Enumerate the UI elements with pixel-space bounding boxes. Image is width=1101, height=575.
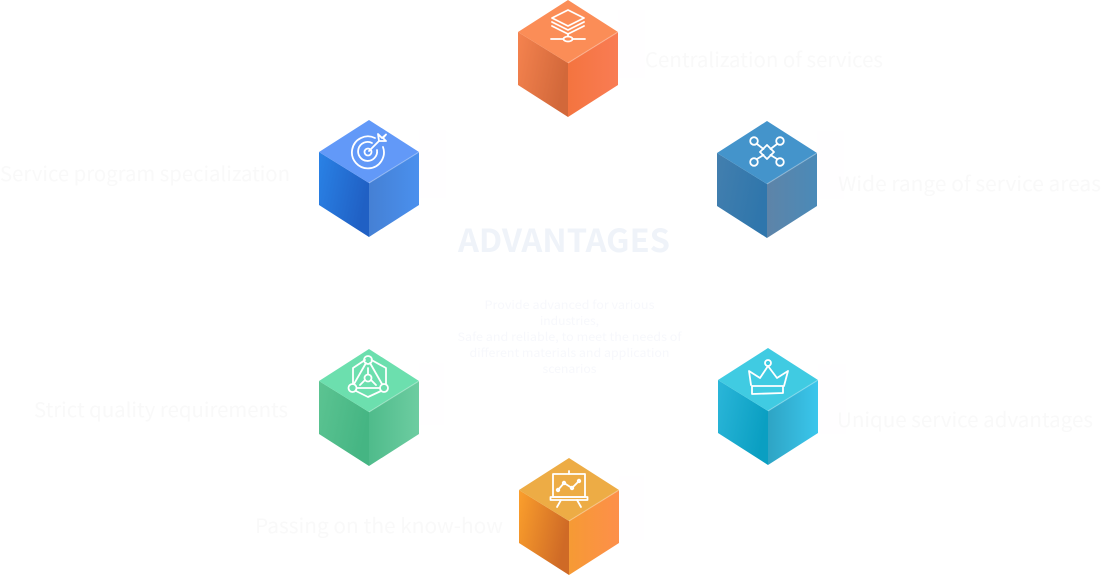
icon: molecule polygon [348,356,388,397]
center description: industries, [540,313,599,329]
label: wide range of service areas: Wide range of service areas [838,168,1101,197]
cube: know-how (amber) [519,458,644,575]
icon: presentation board with chart [550,471,588,507]
center description [458,297,683,377]
icon: crown [749,360,788,394]
label: unique service advantages: Unique service advantages [837,404,1093,433]
cube: specialization (blue) [319,120,446,237]
label: passing on the know-how: Passing on the know-how [255,510,503,539]
cube: service areas (steel blue) [717,121,844,238]
label: service program specialization: Service program specialization [0,158,290,187]
label: strict quality requirements: Strict quality requirements [34,394,288,423]
cube: quality (green) [319,349,444,466]
center description: Safe and reliable, to meet the needs of [458,329,683,345]
center description: different materials and application [470,345,670,361]
cube: centralization (orange) [518,0,645,117]
icon: target with arrow [352,134,386,168]
center heading: ADVANTAGES [457,216,670,262]
label: centralization of services: Centralization of services [645,44,883,73]
cube: unique advantages (cyan) [718,348,846,465]
icon: server network [551,10,585,42]
icon: cross nodes [750,137,784,166]
center description: Provide advanced for various [484,297,654,313]
center description: scenarios [542,361,596,377]
